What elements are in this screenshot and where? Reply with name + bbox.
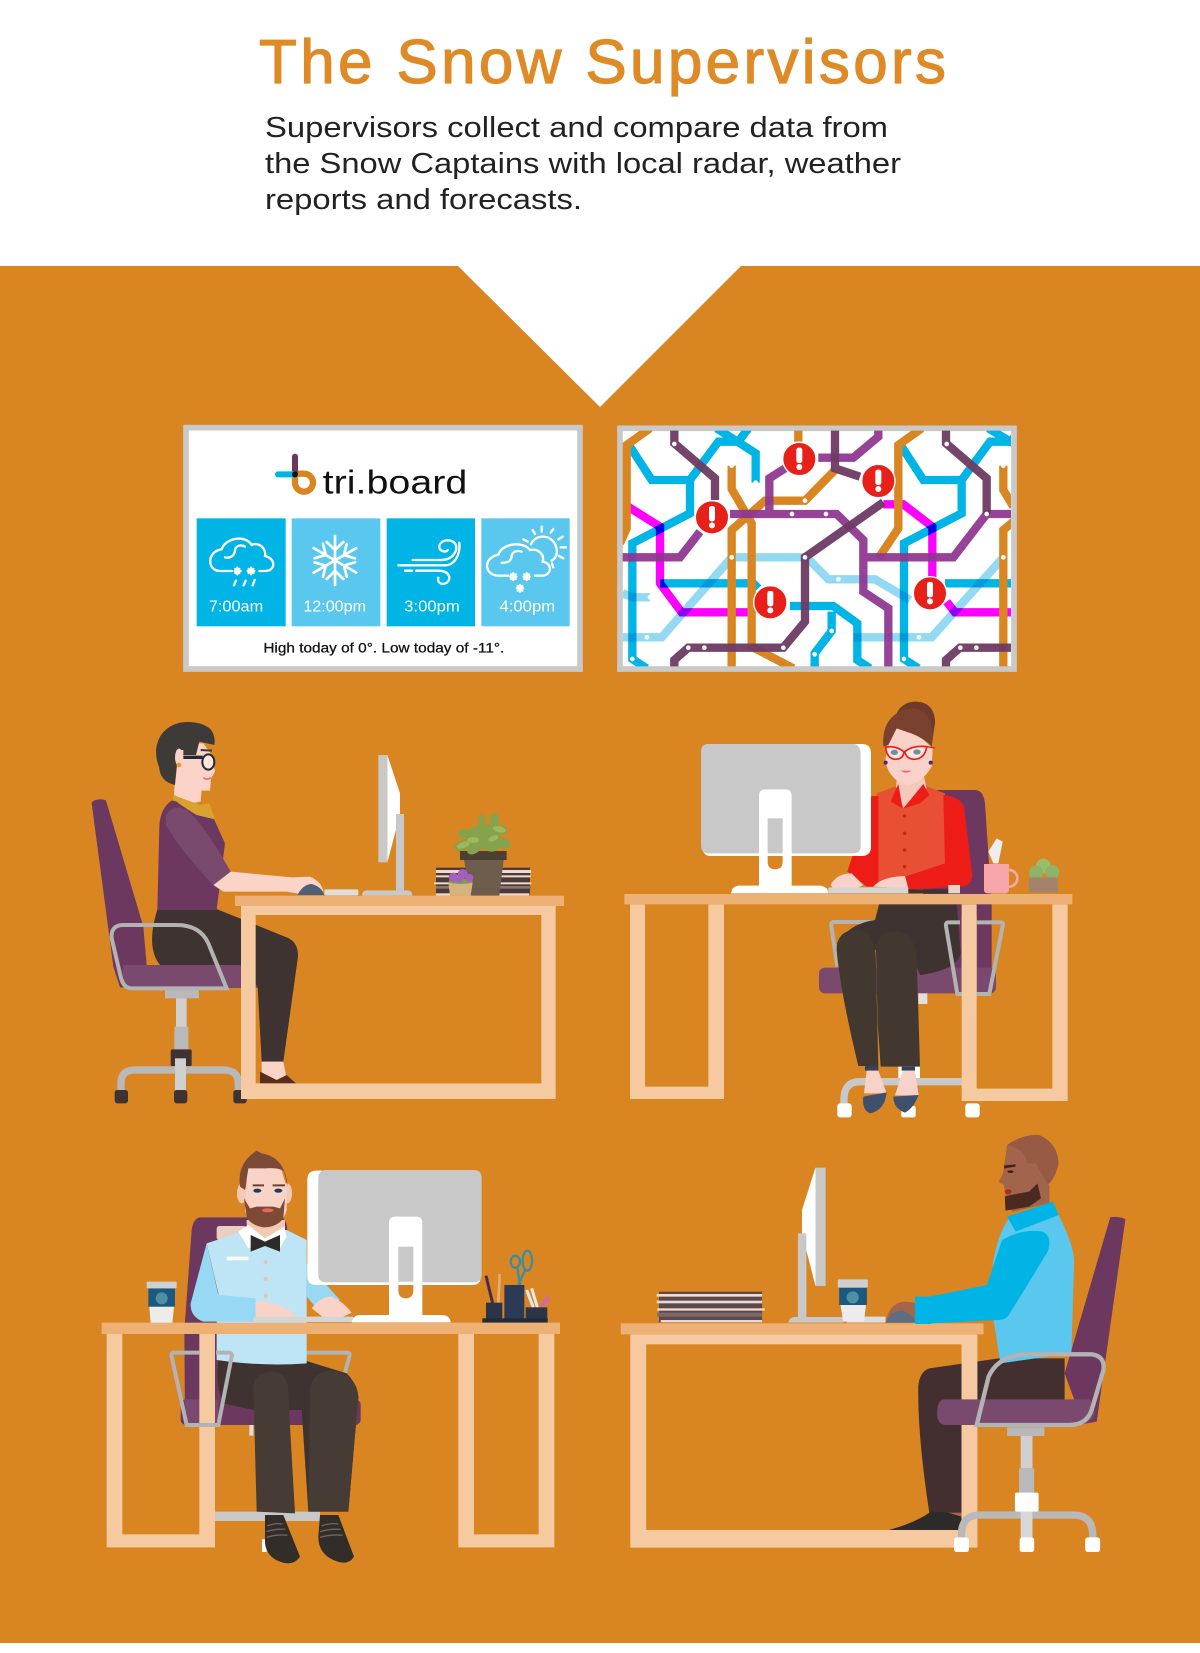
desk organizer bbox=[482, 1251, 550, 1323]
monitor, rear view bbox=[307, 1170, 482, 1322]
tile: 3:00pm bbox=[387, 518, 475, 626]
tile: 12:00pm: 12:00pm bbox=[303, 599, 366, 616]
scene: woman in profile at desk bbox=[92, 722, 564, 1103]
alert badge bbox=[783, 442, 816, 476]
coffee mug with tissue bbox=[984, 838, 1017, 893]
person bbox=[828, 702, 972, 1113]
title: The Snow Supervisors bbox=[259, 28, 946, 97]
tile: 12:00pm bbox=[292, 518, 380, 626]
logo: tri.board: tri.board bbox=[323, 464, 467, 501]
scene: bearded man facing front at desk bbox=[102, 1151, 560, 1563]
scene: woman facing front at desk bbox=[624, 702, 1072, 1117]
person bbox=[112, 722, 358, 1083]
office chair bbox=[819, 790, 996, 1117]
intro text: the Snow Captains with local radar, weather bbox=[265, 148, 901, 180]
desk bbox=[235, 896, 564, 1099]
person torso and head bbox=[885, 1135, 1104, 1425]
tile: 3:00pm: 3:00pm bbox=[404, 599, 460, 616]
chair right armrest bbox=[946, 917, 1003, 997]
panel: transit map screen bbox=[620, 428, 1020, 669]
alert badge bbox=[913, 577, 947, 610]
monitor, side view bbox=[788, 1168, 843, 1323]
book stack bbox=[434, 868, 531, 896]
scene: man in profile at desk bbox=[621, 1135, 1125, 1552]
keyboard bbox=[847, 1317, 885, 1323]
office chair bbox=[937, 1217, 1125, 1552]
small cactus plant bbox=[1029, 859, 1059, 893]
monitor, side view bbox=[362, 755, 412, 896]
intro text: reports and forecasts. bbox=[265, 184, 582, 216]
alert badge bbox=[862, 464, 895, 498]
office chair bbox=[92, 799, 262, 1103]
tile: 4:00pm: 4:00pm bbox=[499, 599, 555, 616]
alert badge bbox=[695, 501, 729, 534]
person legs bbox=[889, 1358, 1065, 1530]
subway-style route lines bbox=[620, 428, 1020, 668]
desk bbox=[624, 894, 1072, 1101]
alert badge bbox=[754, 586, 787, 619]
coffee cup bbox=[147, 1282, 177, 1323]
book stack bbox=[657, 1292, 765, 1322]
panel: tri.board weather screen bbox=[186, 428, 580, 669]
tile: 7:00am bbox=[197, 518, 286, 626]
intro text: Supervisors collect and compare data from bbox=[265, 112, 888, 144]
desk bbox=[621, 1323, 983, 1548]
monitor, rear view bbox=[701, 744, 871, 893]
temperature caption: High today of 0°. Low today of -11°. bbox=[263, 640, 504, 656]
tile: 7:00am: 7:00am bbox=[209, 599, 263, 616]
potted plant bbox=[453, 813, 512, 896]
office chair bbox=[181, 1217, 361, 1552]
person bbox=[191, 1151, 358, 1563]
coffee cup bbox=[838, 1279, 868, 1322]
intro text bbox=[265, 112, 901, 216]
logo: tri.board bbox=[278, 457, 467, 501]
desk bbox=[102, 1323, 560, 1547]
small violet plant bbox=[448, 869, 473, 896]
chair left armrest bbox=[171, 1353, 232, 1425]
tile: 4:00pm bbox=[481, 518, 570, 626]
